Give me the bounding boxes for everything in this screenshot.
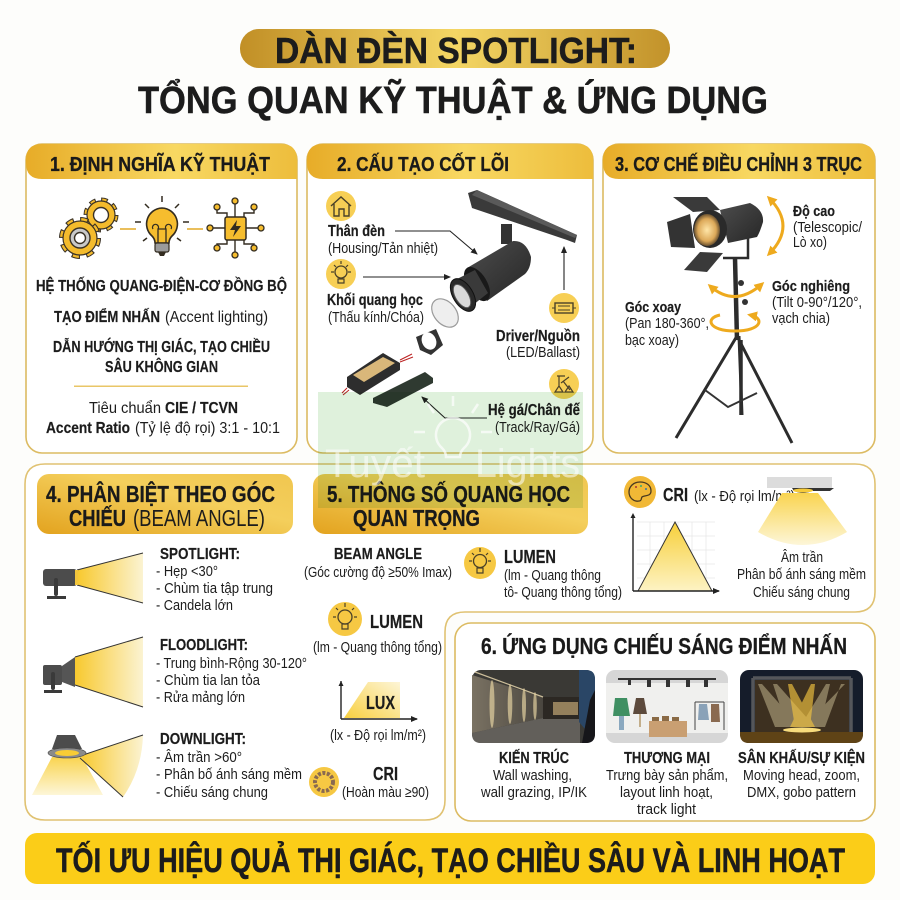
text: cri: CRI	[373, 764, 398, 784]
label: housing: (Housing/Tản nhiệt)	[328, 240, 438, 257]
label: mount: Hệ gá/Chân đế	[488, 402, 580, 419]
text: definition statements: DẪN HƯỚNG THỊ GIÁC, TẠO CHIỀU	[53, 337, 270, 356]
label: driver	[496, 328, 580, 361]
icon: housing	[326, 191, 356, 221]
text: definition statements	[36, 275, 287, 376]
heading 4: 4. PHÂN BIỆT THEO GÓC	[46, 480, 275, 507]
text: floodlight: FLOODLIGHT:	[160, 637, 248, 654]
icon: driver	[549, 293, 579, 323]
text: floodlight: - Chùm tia lan tỏa	[156, 672, 261, 689]
label: pan: bạc xoay)	[625, 332, 679, 349]
watermark	[318, 392, 583, 508]
label: optics	[327, 292, 424, 326]
text: lumen 2: (lm - Quang thông tổng)	[313, 639, 442, 656]
text: architecture: KIẾN TRÚC	[499, 749, 569, 767]
text: spotlight: - Hẹp <30°	[156, 563, 218, 580]
text: architecture: Wall washing,	[493, 767, 572, 784]
watermark: Lights	[475, 442, 580, 486]
text: stage: Moving head, zoom,	[743, 767, 860, 784]
text: recessed: Chiếu sáng chung	[753, 584, 850, 601]
label: mount	[488, 402, 580, 436]
image: architecture	[472, 670, 595, 743]
text: lumen 1	[504, 547, 622, 601]
text: beam angle: BEAM ANGLE	[334, 546, 422, 563]
text: lumen 2: LUMEN	[370, 612, 423, 632]
icon: circuit chip	[207, 198, 264, 258]
arrow: mount	[422, 397, 487, 418]
heading 5: QUAN TRỌNG	[353, 505, 480, 531]
text: recessed	[737, 549, 866, 601]
panel: 2. core structure	[307, 144, 593, 453]
label: height: (Telescopic/	[793, 219, 863, 236]
panel: sections 4 and 5 container	[25, 464, 875, 820]
label: height: Lò xo)	[793, 234, 827, 251]
label: driver: Driver/Nguồn	[496, 328, 580, 345]
text: retail: Trưng bày sản phẩm,	[606, 767, 728, 784]
arrow: height	[769, 198, 783, 254]
text: standards	[46, 399, 280, 437]
icon: downlight beam	[32, 735, 143, 797]
text: stage: DMX, gobo pattern	[747, 784, 856, 801]
icon: colour wheel	[309, 767, 339, 797]
text: spotlight: - Candela lớn	[156, 597, 233, 614]
text: cri	[342, 764, 429, 801]
text: definition statements: SÂU KHÔNG GIAN	[105, 357, 218, 376]
text: recessed: Âm trần	[781, 549, 823, 566]
label: tilt: Góc nghiêng	[772, 278, 850, 295]
chart: light distribution triangle	[630, 513, 719, 591]
icon: gears	[63, 201, 115, 255]
text: spotlight: SPOTLIGHT:	[160, 546, 240, 563]
title: TỔNG QUAN KỸ THUẬT & ỨNG DỤNG	[138, 77, 768, 122]
text: floodlight: - Trung bình-Rộng 30-120°	[156, 655, 307, 672]
text: retail: layout linh hoạt,	[620, 784, 713, 801]
label: tilt: vạch chia)	[772, 310, 830, 327]
text: definition statements: (Accent lighting)	[165, 309, 268, 326]
text: architecture	[480, 749, 587, 801]
arrow: driver	[563, 247, 565, 290]
text: floodlight	[156, 637, 307, 706]
heading 4: (BEAM ANGLE)	[133, 505, 265, 531]
heading 5	[327, 480, 570, 531]
text: retail: track light	[637, 801, 697, 818]
text: architecture: wall grazing, IP/IK	[480, 784, 587, 801]
text: downlight	[156, 731, 302, 801]
text: standards: (Tỷ lệ độ rọi) 3:1 - 10:1	[135, 420, 280, 437]
label: optics: Khối quang học	[327, 292, 423, 309]
label: optics: (Thấu kính/Chóa)	[328, 309, 424, 326]
chart: lux: LUX	[366, 693, 395, 713]
heading 4: CHIẾU	[69, 504, 126, 531]
label: tilt	[772, 278, 862, 327]
image: retail	[606, 670, 728, 743]
label: pan	[625, 299, 709, 349]
icon: lumen bulb 1	[464, 547, 496, 579]
text: lumen 2	[313, 612, 442, 656]
panel: 4. beam angle	[32, 474, 307, 801]
text: lumen 1: (lm - Quang thông	[504, 567, 601, 584]
text: spotlight	[156, 546, 273, 614]
icon: palette	[624, 476, 656, 508]
text: downlight: - Phân bố ánh sáng mềm	[156, 766, 302, 783]
text: cri: (Hoàn màu ≥90)	[342, 784, 429, 801]
arrow: housing	[395, 231, 477, 254]
text: beam angle	[304, 546, 452, 581]
label: height: Độ cao	[793, 203, 835, 220]
icon: lumen bulb 2	[328, 602, 362, 636]
label: housing	[328, 223, 438, 257]
text: lumen 1: tô- Quang thông tổng)	[504, 584, 622, 601]
text: beam angle: (Góc cường độ ≥50% Imax)	[304, 564, 452, 581]
text: downlight: - Chiếu sáng chung	[156, 784, 268, 801]
image: stage	[740, 670, 863, 743]
label: driver: (LED/Ballast)	[506, 344, 580, 361]
text: downlight: DOWNLIGHT:	[160, 731, 246, 748]
arrow: optics	[363, 276, 450, 278]
panel: 1. technical definition	[26, 144, 297, 453]
icon: mount	[549, 369, 579, 399]
panel: 3. three-axis adjustment	[603, 144, 875, 453]
text: cri heading: CRI	[663, 485, 688, 505]
title: DÀN ĐÈN SPOTLIGHT:	[275, 30, 637, 71]
icon: optics	[326, 259, 356, 289]
text: retail	[606, 750, 728, 818]
text: floodlight: - Rửa mảng lớn	[156, 689, 245, 706]
panel: 5. optical parameters	[304, 474, 866, 801]
panel: 6. accent lighting applications	[455, 623, 875, 821]
text: standards: Tiêu chuẩn	[89, 399, 161, 417]
arrow: pan	[711, 315, 759, 331]
title	[138, 29, 768, 122]
label: height	[793, 203, 863, 251]
spotlight on tripod illustration	[667, 197, 792, 443]
text: definition statements: HỆ THỐNG QUANG-ĐIỆN-CƠ ĐỒNG BỘ	[36, 275, 287, 295]
text: recessed: Phân bố ánh sáng mềm	[737, 566, 866, 583]
icon: light bulb	[135, 196, 189, 256]
heading 1: 1. ĐỊNH NGHĨA KỸ THUẬT	[50, 152, 270, 176]
text: cri heading	[663, 485, 795, 505]
text: spotlight: - Chùm tia tập trung	[156, 580, 273, 597]
text: cri heading: (lx - Độ rọi lm/m²)	[694, 488, 795, 505]
text: lumen 1: LUMEN	[504, 547, 556, 567]
text: downlight: - Âm trần >60°	[156, 749, 242, 766]
chart: lux	[338, 681, 417, 719]
text: stage	[738, 749, 865, 801]
watermark: Tuyết	[325, 442, 425, 486]
heading 2: 2. CẤU TẠO CỐT LÕI	[337, 152, 509, 176]
heading 4	[46, 480, 275, 531]
text: definition statements: TẠO ĐIỂM NHẤN	[54, 307, 160, 326]
icon: spotlight beam	[43, 553, 143, 603]
exploded track light illustration	[342, 190, 577, 407]
icon: floodlight beam	[43, 637, 143, 707]
text: standards: Accent Ratio	[46, 420, 130, 437]
label: pan: (Pan 180-360°,	[625, 315, 709, 332]
arrow: tilt	[710, 284, 762, 297]
icon: recessed downlight	[758, 477, 847, 545]
text: stage: SÂN KHẤU/SỰ KIỆN	[738, 749, 865, 767]
label: pan: Góc xoay	[625, 299, 682, 316]
text: standards: CIE / TCVN	[165, 400, 238, 417]
text: lux unit: (lx - Độ rọi lm/m²)	[330, 727, 426, 744]
label: tilt: (Tilt 0-90°/120°,	[772, 294, 862, 311]
label: housing: Thân đèn	[328, 223, 385, 240]
label: mount: (Track/Ray/Gá)	[495, 419, 580, 436]
heading 5: 5. THÔNG SỐ QUANG HỌC	[327, 480, 570, 507]
text: retail: THƯƠNG MẠI	[624, 750, 710, 767]
